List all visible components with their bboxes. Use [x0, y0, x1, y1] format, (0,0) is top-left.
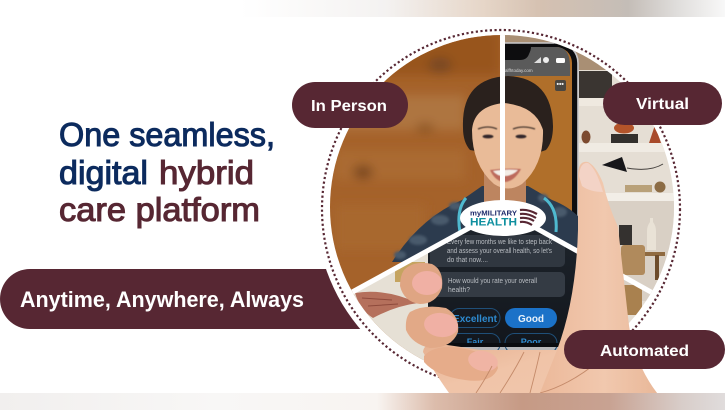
phone chat screen: Poor: [521, 337, 542, 347]
stethoscope: [459, 198, 556, 232]
thumb: [540, 162, 657, 393]
phone body and video screen: alfhtoday.com: [505, 68, 533, 73]
phone chat screen: Good: [518, 314, 544, 325]
wood wall background: [330, 35, 510, 360]
phone chat screen: Fair: [467, 337, 484, 347]
phone chat screen: [428, 230, 577, 350]
neck: [484, 173, 526, 203]
app logo badge: [460, 200, 546, 236]
circular photo: [330, 35, 674, 360]
title: One seamless,: [59, 116, 275, 153]
logo flag: [520, 210, 537, 225]
pill: Automated: Automated: [600, 343, 689, 360]
eyebrows, eyes and smile: [478, 127, 535, 182]
bottom-left photo slice: [352, 253, 428, 360]
pill: Automated: [564, 330, 725, 369]
hair: [463, 76, 553, 155]
index fingernail: [412, 271, 442, 295]
middle fingernail: [423, 311, 459, 339]
pill: In Person: [292, 82, 408, 128]
phone chat screen: and assess your overall health, so let's: [447, 248, 552, 255]
pill: Anytime, Anywhere, Always: Anytime, Anywhere, Always: [20, 287, 304, 312]
top gradient band: [240, 0, 725, 17]
hand holding phone: [400, 162, 657, 393]
bottom gradient band: [0, 393, 725, 410]
title: care platform: [59, 191, 260, 228]
dotted ring: [322, 30, 680, 388]
app logo badge: myMILITARY: [470, 210, 517, 218]
pill: Virtual: Virtual: [636, 96, 689, 113]
face: [472, 103, 543, 188]
palm: [423, 325, 657, 393]
title: [59, 116, 275, 228]
room background in right half: [505, 35, 674, 324]
phone chat screen: Every few months we like to step back: [447, 239, 552, 246]
app logo badge: HEALTH: [470, 216, 517, 228]
pill: Virtual: [603, 82, 722, 125]
phone body and video screen: •••: [556, 82, 564, 88]
ring finger: [424, 347, 498, 381]
index finger: [400, 263, 442, 304]
uniform: [392, 186, 580, 262]
title: digital: [59, 154, 148, 191]
title: hybrid: [159, 154, 254, 191]
palm creases: [476, 352, 600, 393]
thumb nail: [579, 163, 603, 192]
phone chat screen: How would you rate your overall: [448, 278, 537, 285]
phone body and video screen: [505, 42, 579, 216]
phone chat screen: do that now....: [447, 257, 488, 264]
woman portrait: [392, 76, 580, 262]
white divider lines: [345, 28, 660, 297]
phone chat screen: Excellent: [453, 314, 498, 325]
middle finger: [406, 307, 458, 348]
pill: In Person: In Person: [311, 98, 387, 115]
phone chat screen: health?: [448, 287, 470, 294]
ring fingernail: [466, 348, 500, 374]
